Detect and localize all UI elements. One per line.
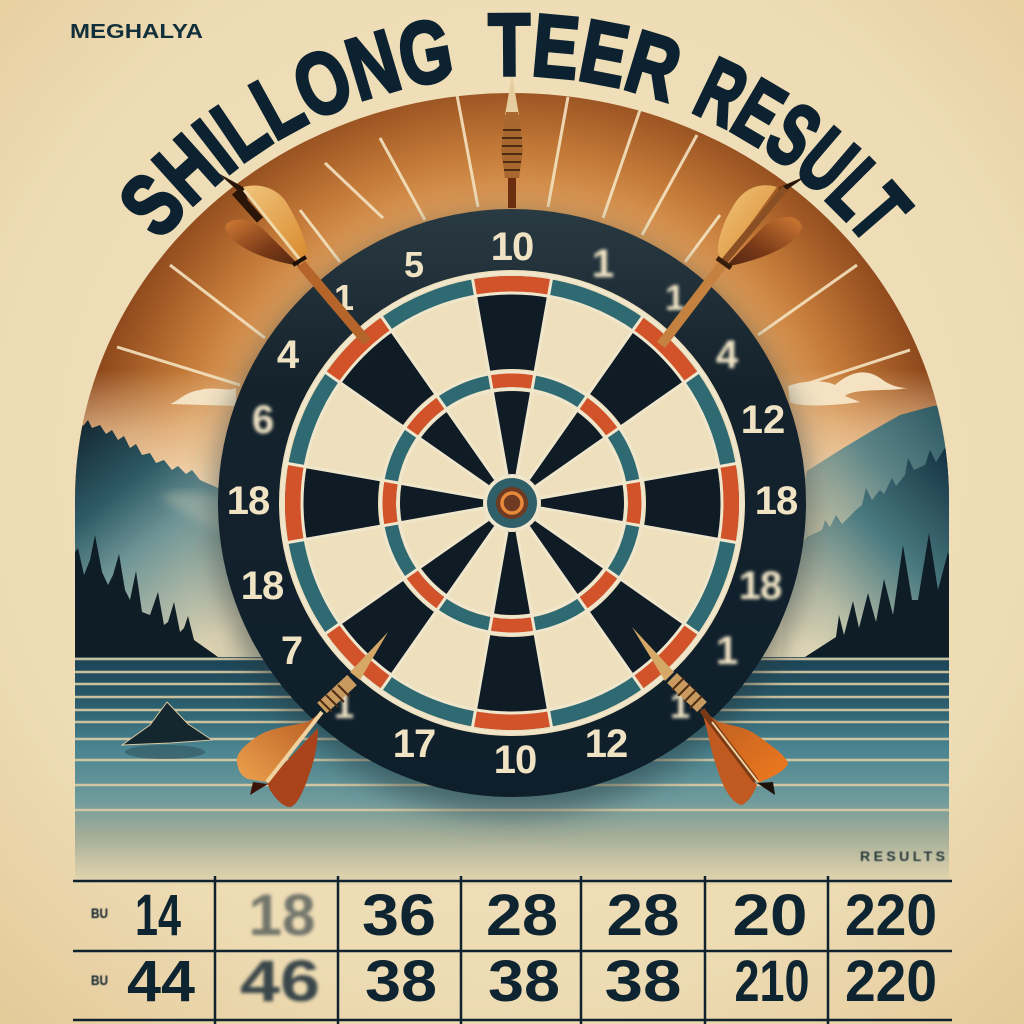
right cloud (788, 372, 908, 405)
dart: lower right (632, 627, 788, 805)
island (122, 702, 212, 759)
rim numbers: 1 (670, 685, 690, 726)
row labels: BU (91, 905, 108, 921)
dart: upper right (661, 175, 808, 345)
row labels: BU (91, 972, 108, 988)
scoring wedges (303, 294, 721, 712)
rim numbers: 1 (334, 277, 354, 318)
sunset sky (75, 93, 949, 490)
right near ridge (788, 448, 949, 648)
dartboard shadow (212, 215, 812, 815)
rim numbers: 1 (665, 277, 685, 318)
rim numbers: 12 (741, 398, 785, 442)
rim numbers: 12 (585, 722, 627, 766)
row 1 values: 36 (362, 883, 436, 948)
outer number rim (218, 209, 806, 797)
lower sky fill (75, 500, 950, 570)
rim numbers: 1 (716, 629, 738, 673)
row 1 values: 28 (606, 883, 680, 948)
row 2 values (127, 949, 937, 1014)
row 1 values: 18 (248, 883, 316, 948)
rim numbers: 18 (241, 564, 284, 608)
horizon glow (75, 370, 950, 500)
row 1 values (135, 883, 937, 948)
rim numbers: 17 (393, 722, 435, 766)
rim numbers: 10 (491, 225, 533, 269)
row 2 values: 44 (127, 949, 195, 1014)
results table (73, 876, 952, 1024)
rim numbers: 7 (281, 629, 303, 673)
row 1 values: 220 (845, 883, 937, 948)
rim numbers: 1 (334, 685, 354, 726)
right far hill (782, 406, 949, 630)
table grid (73, 876, 952, 1024)
left mist (160, 492, 225, 532)
rim numbers (227, 225, 798, 782)
row 2 values: 38 (604, 949, 682, 1014)
left far hill (75, 420, 262, 660)
water bands (75, 659, 950, 810)
left cloud (170, 388, 236, 406)
rim numbers: 4 (716, 333, 739, 377)
rim numbers: 18 (739, 564, 782, 608)
results caption: RESULTS (860, 848, 945, 864)
rim numbers: 6 (252, 398, 274, 442)
label: Meghalya: MEGHALYA (70, 21, 203, 43)
treble ring (389, 380, 635, 626)
dart: upper left (218, 173, 367, 342)
dartboard (218, 209, 806, 797)
row 2 values: 38 (365, 949, 437, 1014)
rim numbers: 5 (404, 244, 424, 285)
rim numbers: 4 (277, 333, 300, 377)
double ring (293, 284, 731, 722)
wires (284, 275, 740, 731)
ring outlines (282, 273, 742, 733)
rim numbers: 1 (592, 242, 614, 286)
water (75, 657, 950, 885)
rim numbers: 10 (494, 738, 536, 782)
dart: top (501, 75, 523, 208)
row 1 values: 20 (732, 883, 808, 948)
rim numbers: 18 (755, 479, 798, 523)
dart: lower left (237, 632, 388, 807)
sunset landscape panel (75, 90, 950, 885)
left forest (75, 535, 218, 657)
rim numbers: 18 (227, 479, 270, 523)
sun rays (117, 95, 910, 385)
row 2 values: 220 (845, 949, 937, 1014)
row 2 values: 38 (488, 949, 560, 1014)
title: SHILLONGTEERRESULT (122, 12, 916, 238)
board face (279, 270, 745, 736)
right forest (805, 533, 950, 657)
row 1 values: 28 (486, 883, 558, 948)
row 1 values: 14 (135, 883, 181, 948)
row 2 values: 46 (240, 949, 320, 1014)
row 2 values: 210 (734, 949, 810, 1014)
row labels (91, 905, 108, 988)
bullseye (483, 474, 541, 532)
